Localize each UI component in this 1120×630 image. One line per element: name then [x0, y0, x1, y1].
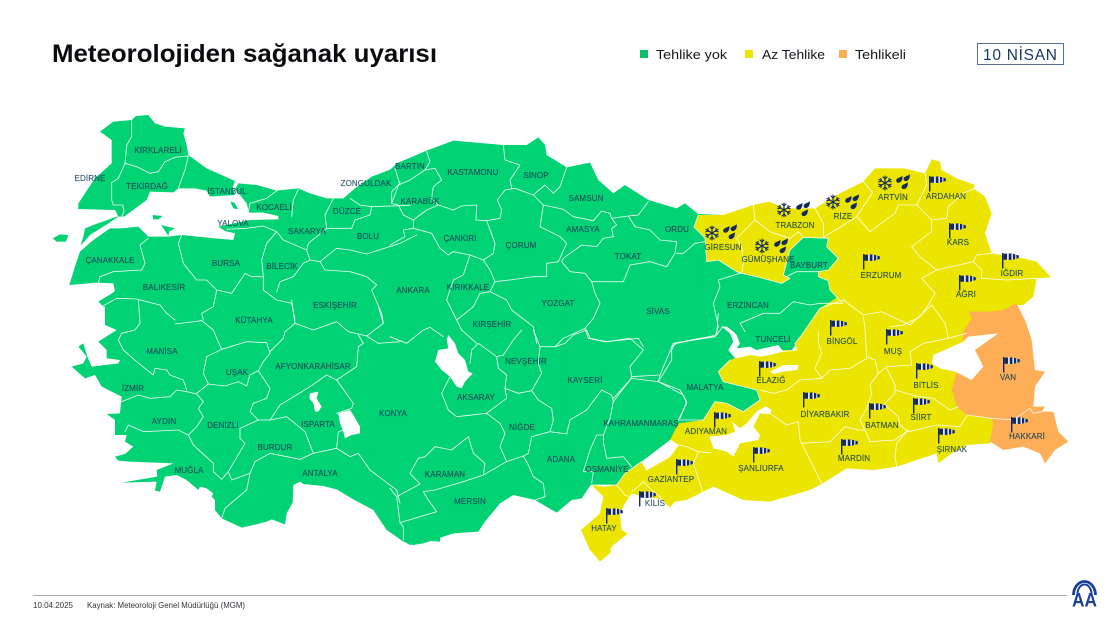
label: Edirne: EDİRNE	[75, 174, 105, 183]
label: Trabzon: TRABZON	[775, 221, 815, 230]
icon: windsock Mardin	[841, 439, 858, 454]
label: Isparta: ISPARTA	[301, 420, 335, 429]
title: Meteorolojiden sağanak uyarısı	[52, 40, 437, 68]
label: Hakkari: HAKKARİ	[1009, 432, 1045, 441]
icon: windsock Bitlis	[916, 363, 933, 378]
label: İzmir: İZMİR	[122, 384, 144, 393]
footer	[33, 596, 1067, 610]
label: Yalova: YALOVA	[217, 219, 249, 228]
map of Turkey	[53, 115, 1068, 562]
label: Şanlıurfa: ŞANLIURFA	[738, 464, 784, 473]
icon: snow and rain Rize	[827, 194, 859, 209]
icon: windsock Elazığ	[759, 361, 776, 376]
label: Bayburt: BAYBURT	[790, 261, 828, 270]
label: Muş: MUŞ	[884, 347, 902, 356]
icon: snow and rain Artvin	[879, 174, 910, 190]
label: Bilecik: BİLECİK	[266, 262, 298, 271]
label: Bingöl: BİNGÖL	[827, 337, 858, 346]
icon: windsock Erzurum	[863, 254, 880, 270]
risk area: orange Van and Hakkari	[952, 303, 1068, 463]
label: Bursa: BURSA	[212, 259, 241, 268]
icon: windsock Adıyaman	[714, 412, 731, 428]
label: Aksaray: AKSARAY	[457, 393, 496, 402]
label: Bitlis: BİTLİS	[913, 381, 939, 390]
label: Kırıkkale: KIRIKKALE	[447, 283, 489, 292]
label: Rize: RİZE	[834, 212, 852, 221]
label: Kütahya: KÜTAHYA	[235, 316, 273, 325]
legend item: Az Tehlike: Az Tehlike	[762, 47, 825, 62]
label: Erzincan: ERZİNCAN	[727, 301, 769, 310]
label: Manisa: MANİSA	[146, 347, 178, 356]
label: Ordu: ORDU	[665, 225, 689, 234]
legend	[640, 47, 906, 62]
label: Giresun: GİRESUN	[704, 243, 742, 252]
icon: windsock Ardahan	[929, 176, 946, 192]
label: Adıyaman: ADIYAMAN	[685, 427, 727, 436]
label: Sinop: SİNOP	[523, 171, 549, 180]
label: Kırklareli: KIRKLARELİ	[134, 146, 182, 155]
label: Batman: BATMAN	[865, 421, 899, 430]
lakes	[309, 327, 998, 457]
icon: windsock Muş	[886, 329, 903, 344]
icon: windsock Van	[1003, 357, 1020, 372]
label: Mardin: MARDİN	[838, 454, 870, 463]
label: Artvin: ARTVİN	[878, 193, 908, 202]
label: Ardahan: ARDAHAN	[926, 192, 966, 201]
footer date: 10.04.2025	[33, 601, 74, 610]
label: Denizli: DENİZLİ	[207, 421, 239, 430]
label: Siirt: SİİRT	[911, 413, 931, 422]
province borders	[98, 120, 1042, 540]
icon: windsock Bingöl	[830, 320, 847, 336]
label: İstanbul: İSTANBUL	[207, 187, 247, 196]
icon: windsock Şanlıurfa	[753, 447, 770, 462]
label: Bolu: BOLU	[357, 232, 379, 241]
icon: windsock Kilis	[639, 491, 656, 506]
label: Adana: ADANA	[547, 455, 576, 464]
footer source: Kaynak: Meteoroloji Genel Müdürlüğü (MGM)	[87, 601, 245, 610]
date badge	[978, 44, 1064, 64]
label: Iğdır: IĞDIR	[1001, 269, 1024, 278]
label: Malatya: MALATYA	[686, 383, 724, 392]
legend item: Tehlike yok: Tehlike yok	[656, 47, 728, 62]
icon: windsock Hakkari	[1011, 417, 1028, 432]
label: Kars: KARS	[947, 238, 969, 247]
label: Uşak: UŞAK	[226, 368, 249, 377]
label: Balıkesir: BALIKESİR	[143, 283, 185, 292]
label: Amasya: AMASYA	[566, 225, 600, 234]
label: Kocaeli: KOCAELİ	[256, 203, 292, 212]
land: green base	[53, 115, 847, 545]
icon: windsock Kars	[949, 223, 966, 238]
weather icons	[606, 174, 1028, 524]
label: Osmaniye: OSMANİYE	[585, 465, 629, 474]
label: Nevşehir: NEVŞEHİR	[505, 357, 547, 366]
icon: snow and rain Gümüşhane	[756, 238, 788, 253]
label: Sivas: SİVAS	[646, 307, 670, 316]
label: Tunceli: TUNCELİ	[755, 335, 791, 344]
icon: windsock Hatay	[606, 508, 623, 524]
icon: snow and rain Giresun	[706, 224, 737, 240]
icon: windsock Diyarbakır	[803, 392, 820, 408]
icon: windsock Iğdır	[1002, 253, 1019, 268]
risk area: yellow north-east	[694, 159, 1051, 363]
label: Çorum: ÇORUM	[506, 241, 537, 250]
label: Mersin: MERSİN	[454, 497, 486, 506]
icon: windsock Siirt	[913, 398, 930, 414]
label: Zonguldak: ZONGULDAK	[341, 179, 392, 188]
province labels	[75, 146, 1045, 533]
label: Şırnak: ŞIRNAK	[937, 445, 968, 454]
label: Çankırı: ÇANKIRI	[443, 234, 477, 243]
label: Gümüşhane: GÜMÜŞHANE	[741, 255, 795, 264]
label: Düzce: DÜZCE	[333, 207, 361, 216]
label: Aydın: AYDIN	[152, 417, 176, 426]
label: Bartın: BARTIN	[395, 162, 425, 171]
label: Ağrı: AĞRI	[956, 290, 976, 299]
label: Ankara: ANKARA	[396, 286, 430, 295]
label: Kayseri: KAYSERİ	[568, 376, 602, 385]
label: Kahramanmaraş: KAHRAMANMARAŞ	[603, 419, 679, 428]
icon: windsock Ağrı	[959, 275, 976, 290]
label: Erzurum: ERZURUM	[861, 271, 902, 280]
label: Antalya: ANTALYA	[302, 469, 338, 478]
label: Karabük: KARABÜK	[400, 197, 440, 206]
label: Burdur: BURDUR	[258, 443, 293, 452]
label: Sakarya: SAKARYA	[288, 227, 326, 236]
logo: AA: AA	[1072, 590, 1097, 612]
icon: windsock Şırnak	[938, 428, 955, 444]
date badge: 10 NİSAN	[983, 46, 1057, 64]
label: Diyarbakır: DİYARBAKIR	[800, 410, 850, 419]
label: Niğde: NİĞDE	[509, 423, 535, 432]
label: Muğla: MUĞLA	[174, 466, 204, 475]
legend item: Tehlikeli: Tehlikeli	[855, 47, 906, 62]
label: Van: VAN	[1000, 373, 1016, 382]
legend item: Tehlikeli	[839, 47, 906, 62]
label: Kilis: KİLİS	[645, 499, 665, 508]
label: Kırşehir: KIRŞEHİR	[473, 320, 511, 329]
label: Hatay: HATAY	[591, 524, 617, 533]
label: Gaziantep: GAZİANTEP	[648, 475, 694, 484]
label: Afyonkarahisar: AFYONKARAHİSAR	[275, 362, 351, 371]
label: Yozgat: YOZGAT	[541, 299, 575, 308]
label: Tekirdağ: TEKİRDAĞ	[126, 182, 168, 191]
icon: snow and rain Trabzon	[778, 201, 810, 217]
label: Konya: KONYA	[379, 409, 408, 418]
label: Samsun: SAMSUN	[569, 194, 604, 203]
label: Kastamonu: KASTAMONU	[447, 168, 499, 177]
label: Çanakkale: ÇANAKKALE	[85, 256, 135, 265]
label: Elazığ: ELAZIĞ	[756, 376, 786, 385]
icon: windsock Gaziantep	[676, 459, 693, 474]
icon: windsock Batman	[869, 403, 886, 418]
risk area: yellow south-east	[581, 293, 1017, 562]
label: Karaman: KARAMAN	[425, 470, 465, 479]
label: Eskişehir: ESKİŞEHİR	[313, 301, 357, 310]
logo: AA	[1072, 582, 1097, 612]
label: Tokat: TOKAT	[615, 252, 641, 261]
